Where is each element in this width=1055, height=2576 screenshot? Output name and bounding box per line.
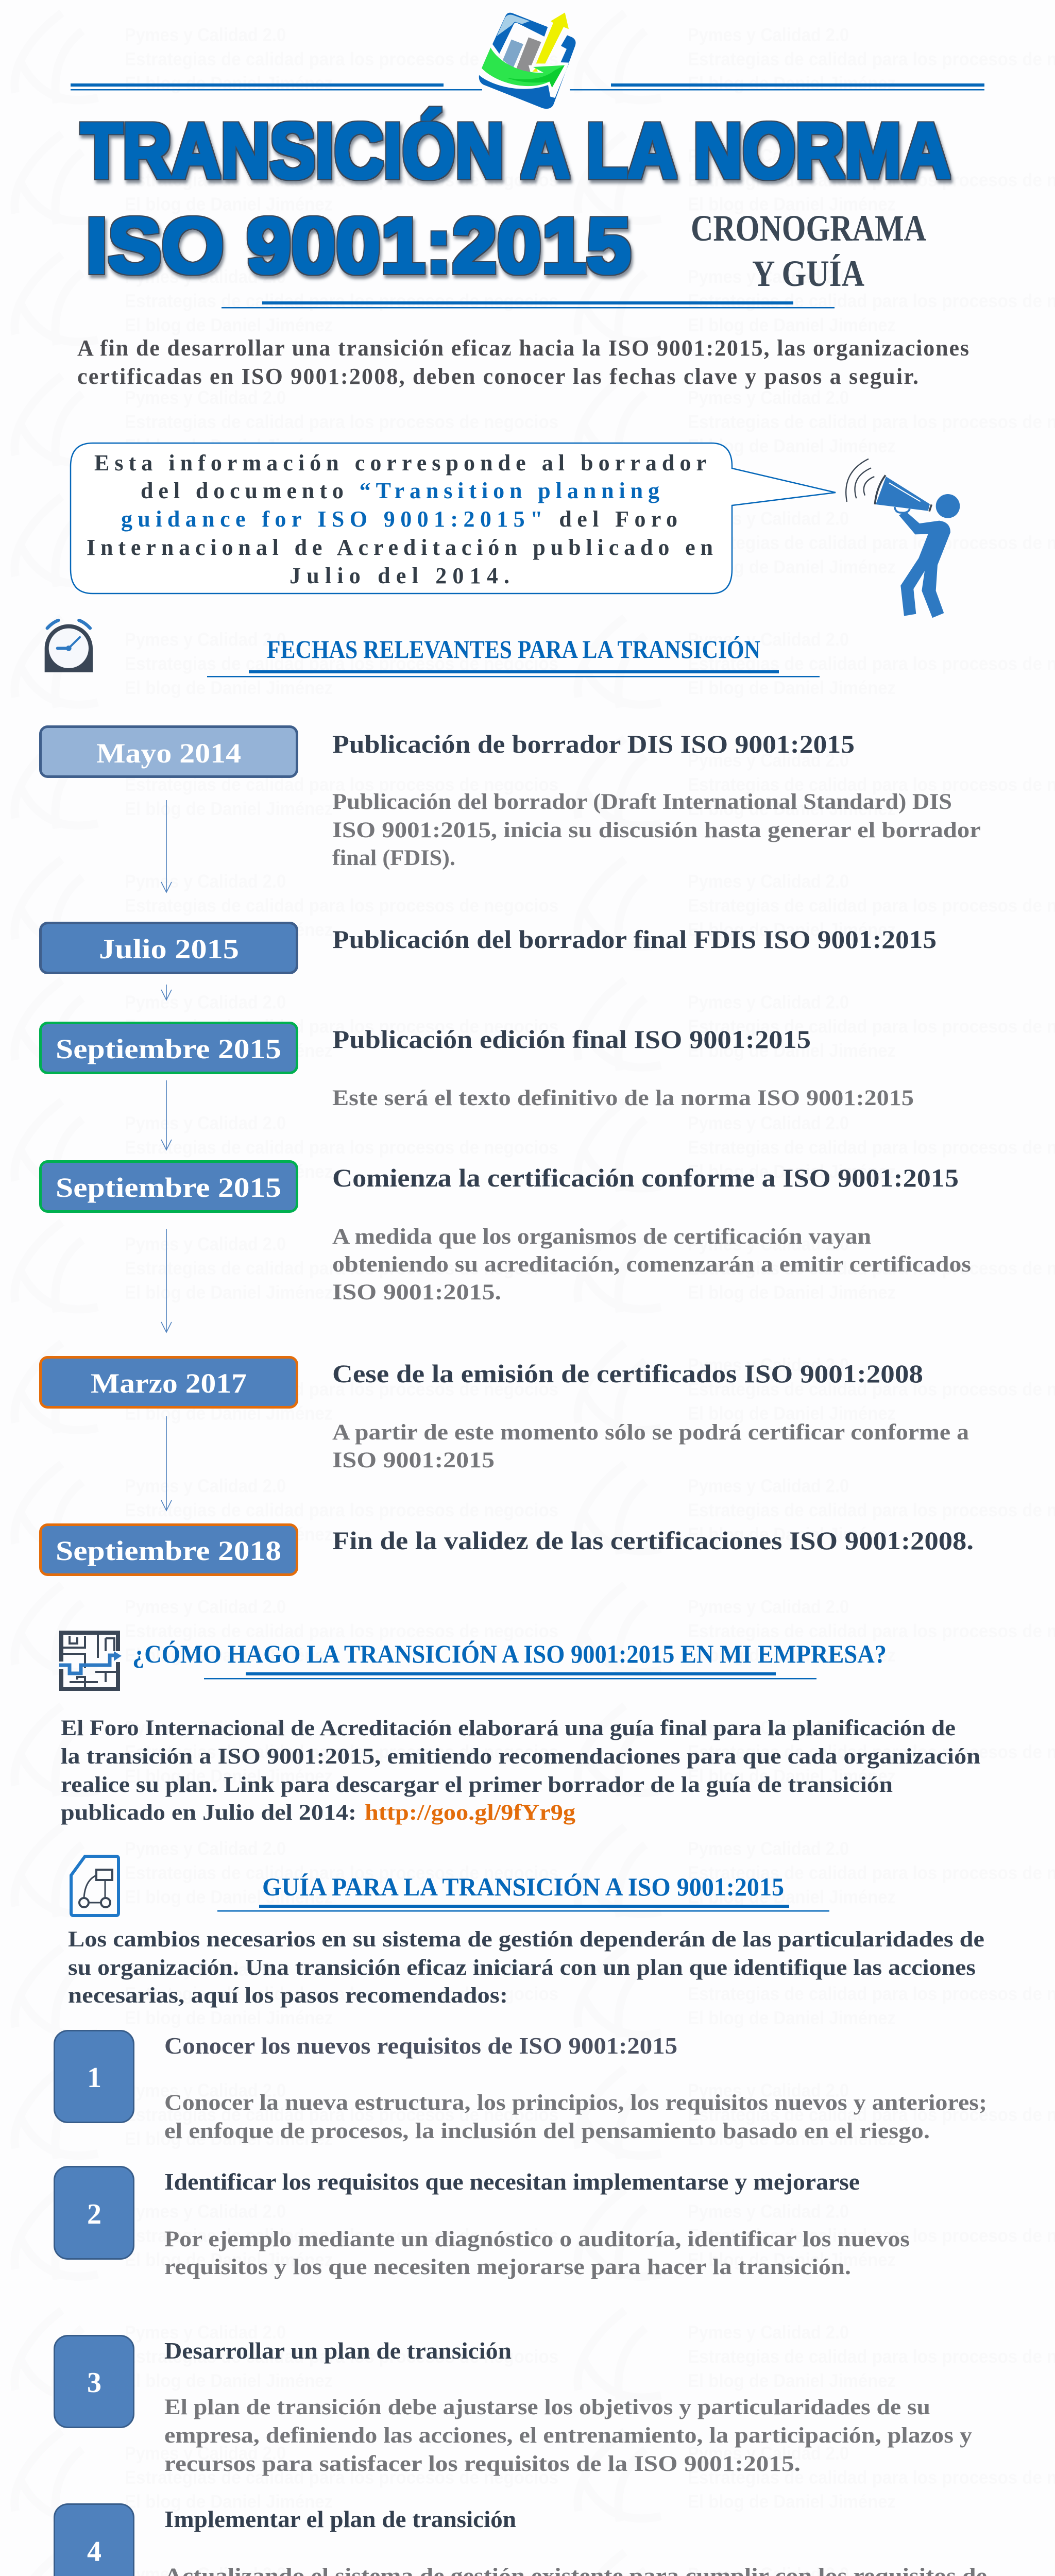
subtitle	[691, 208, 926, 294]
icon: alarm clock	[45, 620, 93, 672]
step 2: requisitos y los que necesiten mejorarse para hacer la transición.	[164, 2255, 851, 2279]
timeline: September 2015 publication: Este será el texto definitivo de la norma ISO 9001:2015	[332, 1086, 914, 1110]
timeline: September 2015 publication: Publicación edición final ISO 9001:2015	[332, 1025, 811, 1054]
timeline: May 2014: ISO 9001:2015, inicia su discusión hasta generar el borrador	[332, 818, 981, 842]
step 3: recursos para satisfacer los requisitos de la ISO 9001:2015.	[164, 2452, 801, 2476]
callout: draft notice	[71, 443, 836, 594]
step 1: Conocer la nueva estructura, los principios, los requisitos nuevos y anteriores;	[164, 2091, 987, 2115]
header divider lines	[71, 83, 984, 91]
icon: maze	[59, 1633, 122, 1689]
step 3	[55, 2336, 973, 2476]
callout: draft notice: Julio del 2014.	[290, 563, 509, 588]
arrow	[161, 985, 172, 1000]
timeline: July 2015	[40, 923, 937, 973]
timeline: September 2015 certification: A medida que los organismos de certificación vayan	[332, 1225, 871, 1249]
heading divider	[204, 1672, 816, 1680]
step 4	[55, 2504, 989, 2576]
timeline: May 2014: Publicación de borrador DIS ISO 9001:2015	[332, 730, 855, 758]
callout: draft notice: del documento “Transition planning	[141, 478, 659, 503]
callout: draft notice: guidance for ISO 9001:2015" del Foro	[121, 506, 677, 532]
paragraph: recommended steps	[68, 1927, 984, 2008]
step 3: empresa, definiendo las acciones, el entrenamiento, la participación, plazos y	[164, 2424, 973, 2448]
icon: flow document	[71, 1856, 118, 1916]
title: TRANSICIÓN A LA NORMA	[81, 107, 950, 195]
timeline: March 2017: Marzo 2017	[91, 1368, 247, 1399]
step 1: el enfoque de procesos, la inclusión del pensamiento basado en el riesgo.	[164, 2119, 930, 2143]
timeline: July 2015: Publicación del borrador final FDIS ISO 9001:2015	[332, 925, 937, 954]
arrow	[161, 800, 172, 892]
timeline: May 2014	[40, 726, 981, 870]
timeline: May 2014: final (FDIS).	[332, 846, 455, 870]
timeline: September 2015 certification	[40, 1161, 971, 1304]
paragraph: IAF guide: realice su plan. Link para descargar el primer borrador de la guía de transición	[61, 1773, 893, 1797]
step 1: 1	[87, 2062, 101, 2094]
icon: logo	[479, 12, 576, 109]
paragraph: recommended steps: necesarias, aquí los pasos recomendados:	[68, 1984, 508, 2008]
icon: person with megaphone	[846, 459, 960, 618]
step 2: Identificar los requisitos que necesitan implementarse y mejorarse	[164, 2168, 860, 2195]
arrow	[161, 1080, 172, 1150]
timeline: September 2015 publication	[40, 1023, 914, 1110]
timeline: May 2014: Publicación del borrador (Draft International Standard) DIS	[332, 790, 952, 814]
paragraph: IAF guide: publicado en Julio del 2014:	[61, 1801, 356, 1825]
intro text: A fin de desarrollar una transición eficaz hacia la ISO 9001:2015, las organizaciones	[77, 335, 969, 361]
timeline: September 2015 publication: Septiembre 2015	[56, 1033, 281, 1064]
step 2: Por ejemplo mediante un diagnóstico o auditoría, identificar los nuevos	[164, 2227, 910, 2251]
heading: transition guide: GUÍA PARA LA TRANSICIÓN A ISO 9001:2015	[262, 1872, 784, 1901]
arrow	[161, 1416, 172, 1511]
heading: key dates: FECHAS RELEVANTES PARA LA TRANSICIÓN	[267, 635, 760, 664]
subtitle: CRONOGRAMA	[691, 208, 926, 249]
heading: how to transition: ¿CÓMO HAGO LA TRANSICIÓN A ISO 9001:2015 EN MI EMPRESA?	[132, 1639, 887, 1668]
timeline: September 2018: Fin de la validez de las certificaciones ISO 9001:2008.	[332, 1526, 974, 1555]
step 3: 3	[87, 2367, 101, 2399]
step 3: El plan de transición debe ajustarse los objetivos y particularidades de su	[164, 2395, 930, 2419]
timeline: March 2017: A partir de este momento sólo se podrá certificar conforme a	[332, 1420, 969, 1445]
timeline: July 2015: Julio 2015	[99, 934, 239, 964]
timeline: May 2014: Mayo 2014	[96, 738, 241, 769]
paragraph: recommended steps: Los cambios necesarios en su sistema de gestión dependerán de las particularidades de	[68, 1927, 984, 1952]
heading divider	[217, 1905, 829, 1911]
intro text	[77, 335, 969, 389]
callout: draft notice: Internacional de Acreditación publicado en	[87, 535, 713, 560]
intro text: certificadas en ISO 9001:2008, deben conocer las fechas clave y pasos a seguir.	[77, 364, 918, 389]
timeline: September 2015 certification: Comienza la certificación conforme a ISO 9001:2015	[332, 1163, 959, 1192]
arrow	[161, 1229, 172, 1332]
title	[81, 107, 950, 290]
paragraph: recommended steps: su organización. Una transición eficaz iniciará con un plan que identifique las acciones	[68, 1956, 976, 1980]
step 4: Implementar el plan de transición	[164, 2506, 516, 2532]
heading divider	[207, 670, 820, 677]
title: ISO 9001:2015	[86, 202, 631, 290]
step 2: 2	[87, 2198, 101, 2230]
step 1: Conocer los nuevos requisitos de ISO 9001:2015	[164, 2032, 677, 2059]
paragraph: IAF guide: El Foro Internacional de Acreditación elaborará una guía final para la planificación de	[61, 1716, 956, 1740]
timeline: March 2017	[40, 1357, 969, 1472]
step 3: Desarrollar un plan de transición	[164, 2337, 512, 2364]
paragraph: IAF guide	[61, 1716, 980, 1825]
step 2	[55, 2167, 910, 2279]
timeline: September 2018: Septiembre 2018	[56, 1535, 281, 1566]
timeline: September 2015 certification: obteniendo su acreditación, comenzarán a emitir certificados	[332, 1252, 971, 1277]
paragraph: IAF guide: http://goo.gl/9fYr9g	[365, 1801, 576, 1825]
step 1	[55, 2031, 987, 2143]
timeline: March 2017: ISO 9001:2015	[332, 1448, 495, 1472]
step 4: 4	[87, 2536, 101, 2568]
timeline: September 2015 certification: Septiembre 2015	[56, 1172, 281, 1203]
timeline: March 2017: Cese de la emisión de certificados ISO 9001:2008	[332, 1359, 923, 1388]
timeline: September 2015 certification: ISO 9001:2015.	[332, 1280, 501, 1304]
timeline: September 2018	[40, 1525, 974, 1574]
callout: draft notice: Esta información corresponde al borrador	[94, 450, 706, 476]
subtitle: Y GUÍA	[752, 253, 864, 294]
title divider	[222, 301, 835, 308]
paragraph: IAF guide: la transición a ISO 9001:2015, emitiendo recomendaciones para que cada organización	[61, 1744, 980, 1769]
